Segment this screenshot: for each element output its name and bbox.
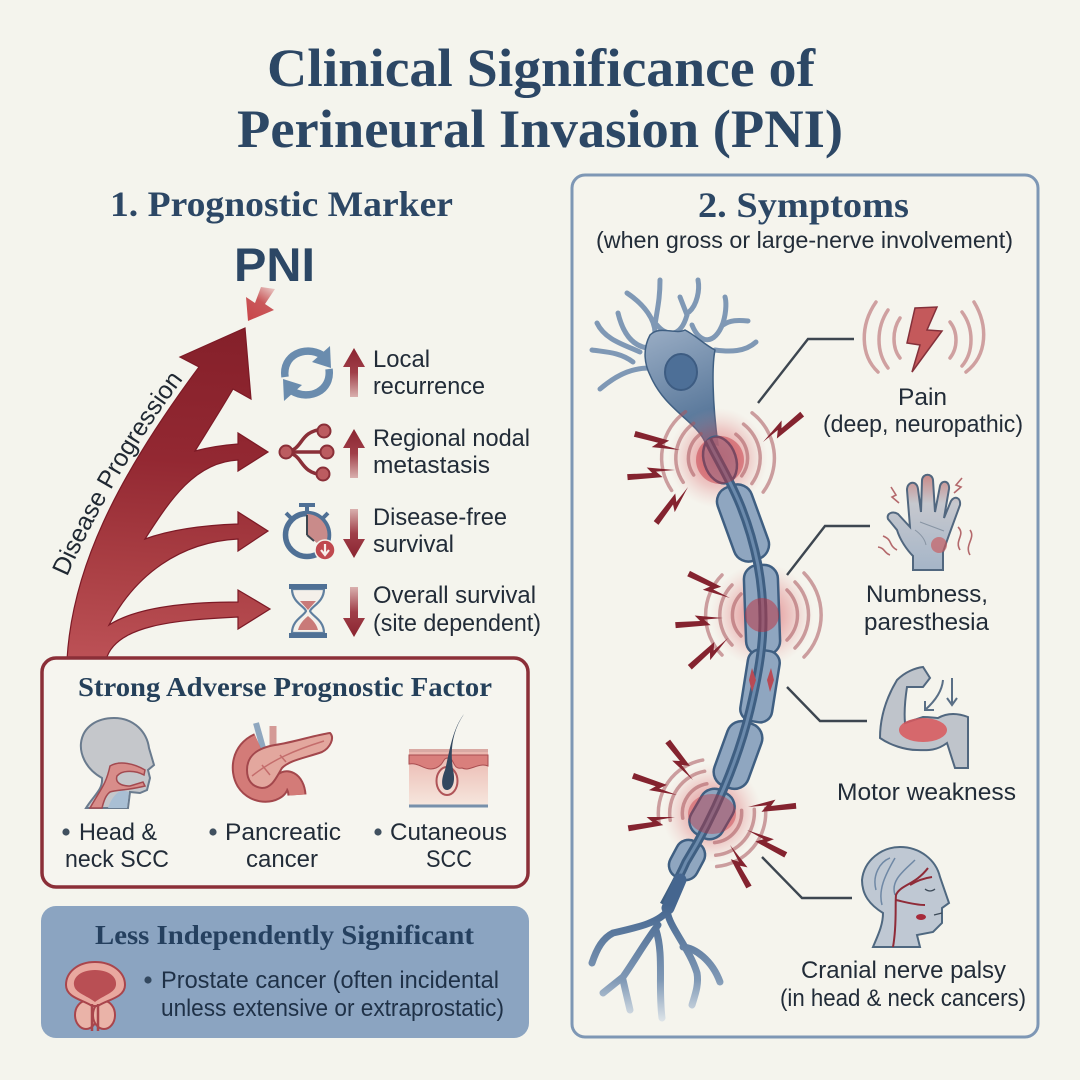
- text: numbness, paresthesia: paresthesia: [864, 609, 990, 636]
- text: pancreatic cancer: Pancreatic: [225, 819, 341, 846]
- text: disease-free survival: survival: [373, 531, 454, 558]
- arrow: PNI pointer: [246, 287, 275, 321]
- icon: prostate: [66, 962, 125, 1031]
- icon: recurrence cycle: [283, 346, 331, 401]
- text: regional nodal metastasis: Regional nodal: [373, 425, 530, 452]
- leader line: pain: [758, 339, 854, 403]
- heading: less independently significant: Less Independently Significant: [95, 920, 474, 950]
- outcome: regional nodal metastasis: [280, 424, 530, 480]
- label: Disease Progression: Disease Progression: [52, 374, 182, 576]
- panel: symptoms: [572, 175, 1038, 1037]
- icon: hourglass: [289, 584, 327, 638]
- text: local recurrence: [373, 346, 485, 400]
- text: pancreatic cancer: cancer: [246, 846, 318, 873]
- text: cutaneous SCC: Cutaneous: [390, 819, 507, 846]
- pain arcs: [646, 409, 821, 877]
- leader line: cranial nerve palsy: [762, 857, 852, 898]
- title: [237, 38, 843, 159]
- icon: branching nodes: [280, 424, 334, 480]
- icon: stopwatch: [286, 505, 335, 560]
- soma: [645, 330, 718, 445]
- myelin segments: [697, 432, 743, 488]
- text: regional nodal metastasis: [373, 425, 530, 479]
- text: pain: [823, 384, 1023, 438]
- text: cutaneous SCC: [374, 819, 507, 873]
- axon: [664, 440, 763, 905]
- pain glow sites: [668, 408, 768, 508]
- leader line: numbness: [787, 526, 870, 575]
- title: Clinical Significance of: [267, 38, 816, 98]
- icon: pain lightning: [864, 302, 984, 372]
- text: pain: Pain: [898, 384, 947, 411]
- text: numbness, paresthesia: [864, 581, 990, 636]
- text: head and neck SCC: Head &: [79, 819, 157, 846]
- text: overall survival: Overall survival: [373, 582, 536, 609]
- panel: strong adverse prognostic factor: [42, 658, 528, 887]
- text: prostate cancer: Prostate cancer (often incidental: [161, 967, 499, 994]
- arrow: down: [343, 587, 365, 637]
- text: cranial nerve palsy: (in head & neck cancers): [780, 985, 1026, 1012]
- nucleus: [665, 354, 697, 390]
- text: cranial nerve palsy: [780, 957, 1026, 1012]
- icon: weak arm: [880, 667, 968, 768]
- pain bolts: [627, 408, 804, 888]
- icon: head and neck: [81, 718, 154, 808]
- diagram: neuron: [592, 280, 821, 1018]
- leader line: motor weakness: [787, 687, 867, 721]
- text: cranial nerve palsy: Cranial nerve palsy: [801, 957, 1006, 984]
- icon: pancreas: [241, 723, 332, 795]
- text: prostate cancer: [144, 967, 504, 1022]
- text: local recurrence: Local: [373, 346, 430, 373]
- title: Perineural Invasion (PNI): [237, 99, 843, 159]
- outcome: disease-free survival: [286, 504, 507, 560]
- outcome: local recurrence: [283, 346, 485, 401]
- arrow: disease progression trunk with branches: [67, 328, 270, 660]
- text: head and neck SCC: neck SCC: [65, 846, 169, 873]
- dendrites: [592, 280, 756, 389]
- arrow: up: [343, 429, 365, 478]
- icon: numb hand: [878, 475, 972, 570]
- icon: skin with hair follicle: [409, 714, 488, 806]
- outcome: overall survival: [289, 582, 541, 638]
- terminal branches: [592, 880, 720, 1018]
- icon: head with cranial nerves: [862, 847, 949, 947]
- panel: less independently significant: [41, 906, 529, 1038]
- text: pancreatic cancer: [209, 819, 341, 873]
- text: pain: (deep, neuropathic): [823, 411, 1023, 438]
- text: overall survival: (site dependent): [373, 610, 541, 637]
- heading: strong adverse prognostic factor: Strong Adverse Prognostic Factor: [78, 672, 492, 702]
- text: cutaneous SCC: SCC: [426, 846, 472, 873]
- text: disease-free survival: [373, 504, 507, 558]
- text: symptoms subtitle: (when gross or large-nerve involvement): [596, 227, 1013, 253]
- pain glow overlays: [696, 436, 744, 484]
- text: numbness, paresthesia: Numbness,: [866, 581, 988, 608]
- label: PNI: PNI: [234, 238, 315, 291]
- text: disease-free survival: Disease-free: [373, 504, 507, 531]
- text: prostate cancer: unless extensive or extraprostatic): [161, 995, 504, 1022]
- arrow: up: [343, 348, 365, 397]
- heading: 1. Prognostic Marker: 1. Prognostic Marker: [110, 184, 453, 224]
- heading: 2. Symptoms: 2. Symptoms: [698, 185, 909, 225]
- text: overall survival: [373, 582, 541, 637]
- arrow: down: [343, 509, 365, 558]
- text: regional nodal metastasis: metastasis: [373, 452, 490, 479]
- text: motor weakness: Motor weakness: [837, 779, 1016, 806]
- text: local recurrence: recurrence: [373, 373, 485, 400]
- text: head and neck SCC: [62, 819, 169, 873]
